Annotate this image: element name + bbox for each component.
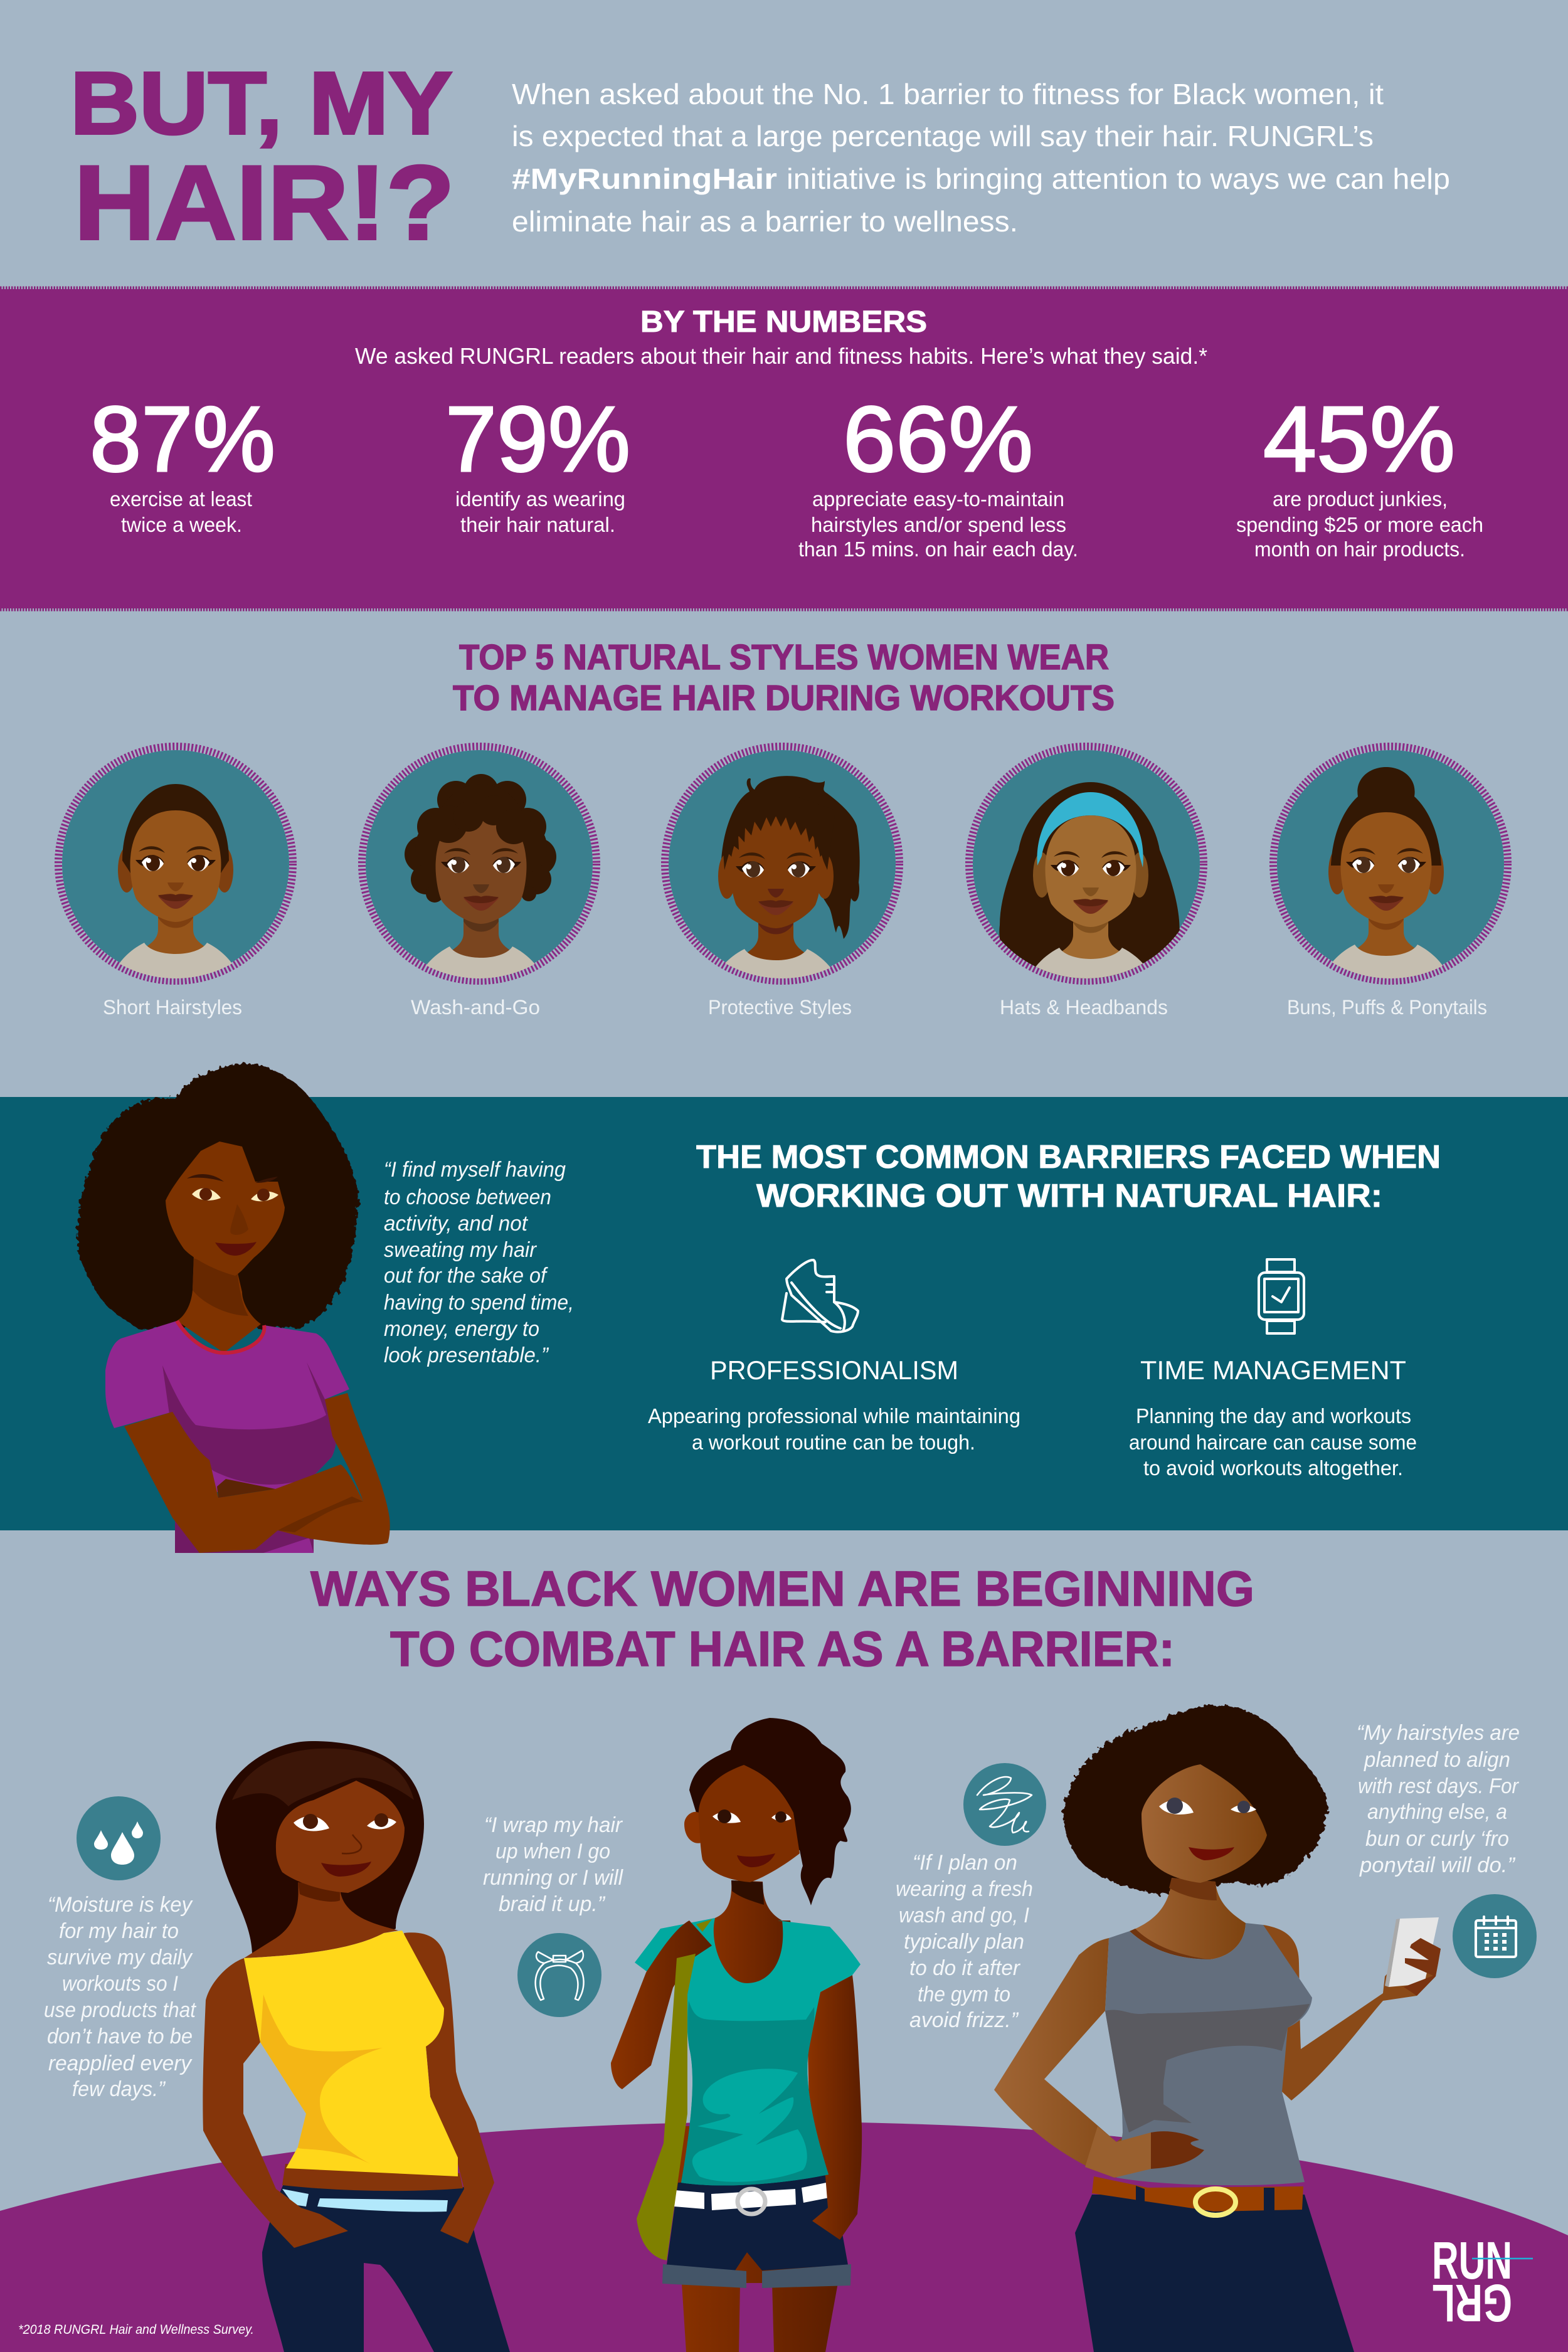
quote: hairstyles rest days: ponytail will do.” xyxy=(1359,1853,1516,1877)
portrait: hats and headbands xyxy=(969,746,1204,1019)
barrier: time management: Planning the day and workouts xyxy=(1136,1404,1411,1428)
intro paragraph xyxy=(512,78,1450,238)
icon: running shoe xyxy=(782,1260,858,1332)
stat: 87%: twice a week. xyxy=(121,513,242,536)
heading: most common barriers xyxy=(696,1139,1441,1214)
heading: by the numbers: BY THE NUMBERS xyxy=(640,305,927,339)
purple ground shape xyxy=(0,2122,1568,2352)
icon: smart watch xyxy=(1259,1259,1304,1333)
intro paragraph: initiative is bringing attention to ways we can help xyxy=(787,162,1450,195)
quote: wrap my hair: up when I go xyxy=(495,1840,610,1863)
stat: 79% xyxy=(445,388,630,536)
icon: curls scribble xyxy=(963,1763,1046,1846)
quote: moisture is key: don’t have to be xyxy=(47,2025,193,2048)
quote: hairstyles rest days: with rest days. For xyxy=(1358,1774,1520,1798)
quote: moisture is key: few days.” xyxy=(72,2077,166,2101)
title xyxy=(70,53,455,262)
illustration: woman in yellow top xyxy=(203,1741,510,2352)
quote: wrap my hair: “I wrap my hair xyxy=(484,1813,623,1837)
intro paragraph: When asked about the No. 1 barrier to fitness for Black women, it xyxy=(512,78,1384,110)
stat: 45%: spending $25 or more each xyxy=(1236,513,1483,536)
stat: 87%: 87% xyxy=(90,388,275,491)
stat: 45%: are product junkies, xyxy=(1273,487,1448,511)
quote: choose between activity: sweating my hair xyxy=(384,1238,538,1262)
quote: hairstyles rest days: “My hairstyles are xyxy=(1357,1721,1520,1745)
quote: fresh wash and go: wearing a fresh xyxy=(896,1877,1033,1901)
quote: choose between activity: out for the sake of xyxy=(384,1264,548,1288)
quote: moisture is key xyxy=(44,1893,196,2101)
quote: wrap my hair: running or I will xyxy=(483,1866,623,1890)
heading: top 5 natural styles: TOP 5 NATURAL STYLES WOMEN WEAR xyxy=(459,637,1109,677)
barrier: professionalism xyxy=(648,1355,1020,1454)
quote: fresh wash and go: the gym to xyxy=(918,1983,1010,2006)
quote: choose between activity xyxy=(384,1158,574,1367)
quote: moisture is key: reapplied every xyxy=(48,2052,193,2075)
heading: top 5 natural styles xyxy=(453,637,1115,718)
stat: 45% xyxy=(1236,388,1483,561)
stat: 66% xyxy=(798,388,1078,561)
icon: water drops xyxy=(77,1796,161,1880)
intro paragraph: eliminate hair as a barrier to wellness. xyxy=(512,205,1018,238)
stat: 45%: month on hair products. xyxy=(1254,538,1465,561)
quote: hairstyles rest days: anything else, a xyxy=(1367,1800,1507,1824)
stat: 87% xyxy=(90,388,275,536)
portrait: protective styles xyxy=(665,746,899,1020)
panel: barriers xyxy=(0,1097,1568,1530)
quote: moisture is key: use products that xyxy=(44,1998,196,2022)
quote: choose between activity: to choose between xyxy=(384,1185,551,1209)
heading: top 5 natural styles: TO MANAGE HAIR DURING WORKOUTS xyxy=(453,678,1115,718)
stat: 79%: identify as wearing xyxy=(455,487,625,511)
barrier: professionalism: Appearing professional while maintaining xyxy=(648,1404,1020,1428)
heading: ways black women combat hair: WAYS BLACK WOMEN ARE BEGINNING xyxy=(310,1560,1254,1616)
panel: by the numbers xyxy=(0,289,1568,609)
illustration: woman with arms crossed xyxy=(77,1063,390,1553)
icon: calendar xyxy=(1453,1894,1537,1978)
barrier: time management: around haircare can cause some xyxy=(1129,1431,1417,1454)
barrier: time management: TIME MANAGEMENT xyxy=(1140,1355,1406,1385)
stat: 45%: 45% xyxy=(1263,388,1455,491)
barrier: professionalism: PROFESSIONALISM xyxy=(710,1355,958,1385)
stat: 66%: 66% xyxy=(843,388,1033,491)
portrait captions: Short Hairstyles xyxy=(103,996,242,1019)
portrait: buns puffs and ponytails xyxy=(1273,746,1508,1016)
stat: 79%: their hair natural. xyxy=(460,513,615,536)
footnote: *2018 RUNGRL Hair and Wellness Survey. xyxy=(18,2323,254,2337)
portrait: short hairstyles xyxy=(58,746,293,1014)
stat: 66%: appreciate easy-to-maintain xyxy=(812,487,1064,511)
intro paragraph: #MyRunningHair xyxy=(512,162,777,195)
quote: hairstyles rest days xyxy=(1357,1721,1520,1877)
stat: 87%: exercise at least xyxy=(110,487,252,511)
logo: rungrl: RUN xyxy=(1432,2231,1512,2290)
quote: moisture is key: for my hair to xyxy=(59,1919,179,1943)
quote: choose between activity: having to spend time, xyxy=(384,1291,574,1315)
quote: fresh wash and go xyxy=(896,1851,1033,2032)
quote: choose between activity: “I find myself having xyxy=(384,1158,566,1182)
quote: choose between activity: look presentable.” xyxy=(384,1343,549,1367)
quote: choose between activity: activity, and not xyxy=(384,1212,529,1236)
quote: fresh wash and go: to do it after xyxy=(909,1956,1021,1980)
quote: wrap my hair xyxy=(483,1813,623,1916)
icon: headband xyxy=(517,1933,601,2017)
stat: 79%: 79% xyxy=(445,388,630,491)
heading: ways black women combat hair xyxy=(310,1560,1254,1677)
title: HAIR!? xyxy=(74,144,455,262)
quote: hairstyles rest days: bun or curly ‘fro xyxy=(1365,1827,1509,1851)
quote: fresh wash and go: “If I plan on xyxy=(913,1851,1017,1875)
barrier: time management xyxy=(1129,1355,1417,1480)
barrier: time management: to avoid workouts altogether. xyxy=(1143,1456,1403,1480)
quote: fresh wash and go: typically plan xyxy=(904,1930,1024,1954)
heading: most common barriers: WORKING OUT WITH NATURAL HAIR: xyxy=(756,1178,1382,1214)
portrait captions: Wash-and-Go xyxy=(411,996,540,1019)
quote: moisture is key: workouts so I xyxy=(62,1972,178,1996)
illustration: woman in teal top xyxy=(611,1718,862,2352)
logo: rungrl: GRL xyxy=(1432,2274,1512,2333)
portrait captions: Protective Styles xyxy=(708,996,852,1019)
heading: ways black women combat hair: TO COMBAT HAIR AS A BARRIER: xyxy=(390,1621,1175,1677)
stat: 66%: than 15 mins. on hair each day. xyxy=(798,538,1078,561)
portrait: wash-and-go xyxy=(362,746,596,1018)
portrait captions: Hats & Headbands xyxy=(1000,996,1168,1019)
title: BUT, MY xyxy=(70,53,452,152)
barrier: professionalism: a workout routine can be tough. xyxy=(692,1431,975,1454)
stat: 66%: hairstyles and/or spend less xyxy=(811,513,1066,536)
illustration: woman in gray tank xyxy=(994,1705,1441,2352)
subheading: We asked RUNGRL readers about their hair and fitness habits. Here’s what they said.* xyxy=(355,343,1207,369)
heading: most common barriers: THE MOST COMMON BARRIERS FACED WHEN xyxy=(696,1139,1441,1175)
quote: moisture is key: survive my daily xyxy=(47,1946,193,1969)
intro paragraph: is expected that a large percentage will say their hair. RUNGRL’s xyxy=(512,120,1374,152)
quote: fresh wash and go: wash and go, I xyxy=(899,1904,1030,1927)
quote: choose between activity: money, energy to xyxy=(384,1317,539,1341)
logo: rungrl xyxy=(1432,2231,1533,2333)
quote: hairstyles rest days: planned to align xyxy=(1364,1748,1510,1772)
quote: wrap my hair: braid it up.” xyxy=(499,1892,606,1916)
quote: moisture is key: “Moisture is key xyxy=(48,1893,193,1917)
quote: fresh wash and go: avoid frizz.” xyxy=(909,2008,1019,2032)
portrait captions: Buns, Puffs & Ponytails xyxy=(1287,996,1487,1019)
portrait captions xyxy=(103,996,1487,1019)
